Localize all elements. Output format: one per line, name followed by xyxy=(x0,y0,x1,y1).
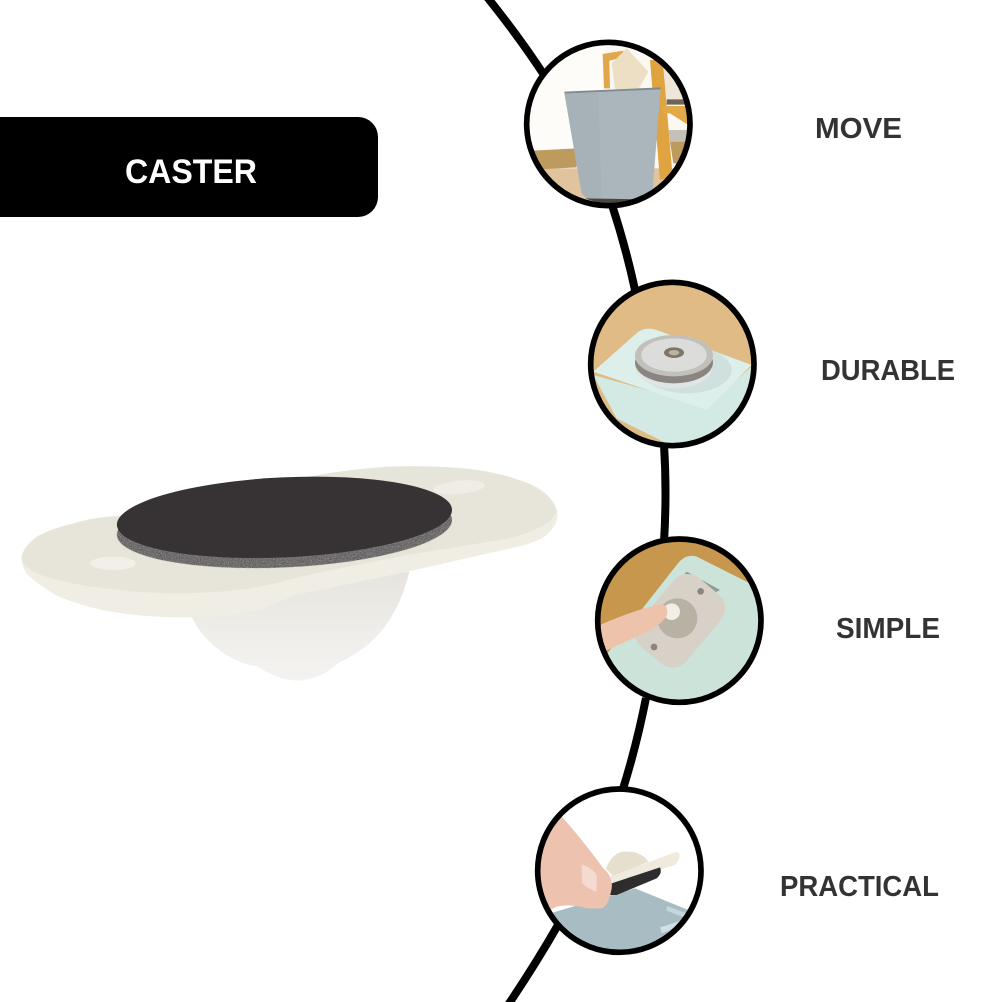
foam pad edge xyxy=(115,479,454,575)
box lid xyxy=(593,329,752,410)
mint panel xyxy=(603,556,763,703)
product photo: caster xyxy=(21,466,557,681)
fingers xyxy=(537,817,612,912)
chair xyxy=(603,51,623,88)
floor xyxy=(544,168,674,202)
screw hole right xyxy=(433,478,486,496)
caster plate xyxy=(21,466,557,617)
tissue xyxy=(612,48,648,89)
tray surface xyxy=(552,888,688,950)
photo circle: simple xyxy=(597,538,763,705)
label: durable: DURABLE xyxy=(821,355,955,387)
mounting plate xyxy=(636,574,725,668)
label: practical: PRACTICAL xyxy=(780,871,939,903)
box side xyxy=(593,367,753,447)
photo circle: move xyxy=(523,40,693,210)
photo circle: durable xyxy=(590,282,757,447)
photo circle: practical xyxy=(537,789,703,955)
title banner xyxy=(0,117,378,217)
weight plates xyxy=(636,367,712,388)
finger xyxy=(600,604,667,653)
label: move: MOVE xyxy=(815,113,902,145)
curved connecting line xyxy=(487,0,666,1002)
title banner: CASTER xyxy=(125,153,257,191)
trash can xyxy=(564,88,661,200)
foam pad top xyxy=(115,469,454,565)
screw hole left xyxy=(90,557,136,570)
label: simple: SIMPLE xyxy=(836,613,940,645)
small caster xyxy=(606,852,648,877)
caster ball xyxy=(191,572,409,681)
